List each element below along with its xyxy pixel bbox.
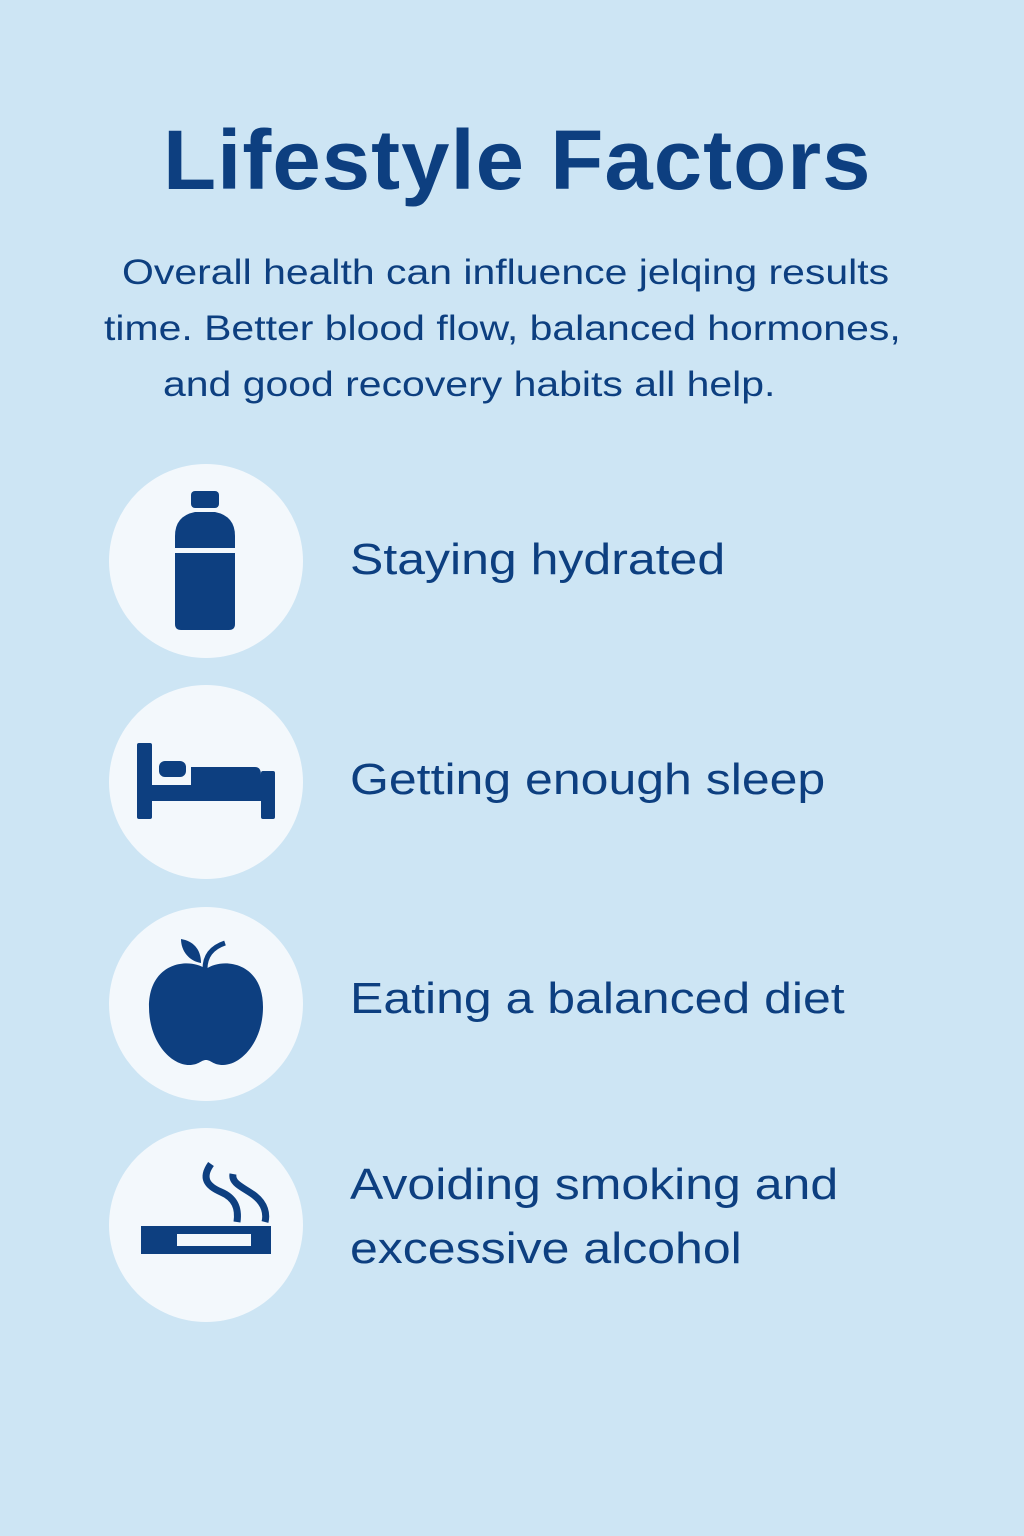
intro text xyxy=(104,253,901,404)
icon: cigarette xyxy=(109,1128,303,1322)
label: hydrated: Staying hydrated xyxy=(350,535,725,584)
icon: bed xyxy=(109,685,303,879)
label: diet: Eating a balanced diet xyxy=(350,974,845,1023)
label: sleep: Getting enough sleep xyxy=(350,755,825,804)
intro text: and good recovery habits all help. xyxy=(163,365,775,404)
intro text: time. Better blood flow, balanced hormones, xyxy=(104,309,901,348)
icon: water bottle xyxy=(109,464,303,658)
label: smoking: Avoiding smoking and xyxy=(350,1160,838,1209)
label: smoking: excessive alcohol xyxy=(350,1224,742,1273)
intro text: Overall health can influence jelqing results xyxy=(122,253,889,292)
title: Lifestyle Factors xyxy=(163,113,872,207)
label: smoking xyxy=(350,1160,838,1273)
icon: apple xyxy=(109,907,303,1101)
